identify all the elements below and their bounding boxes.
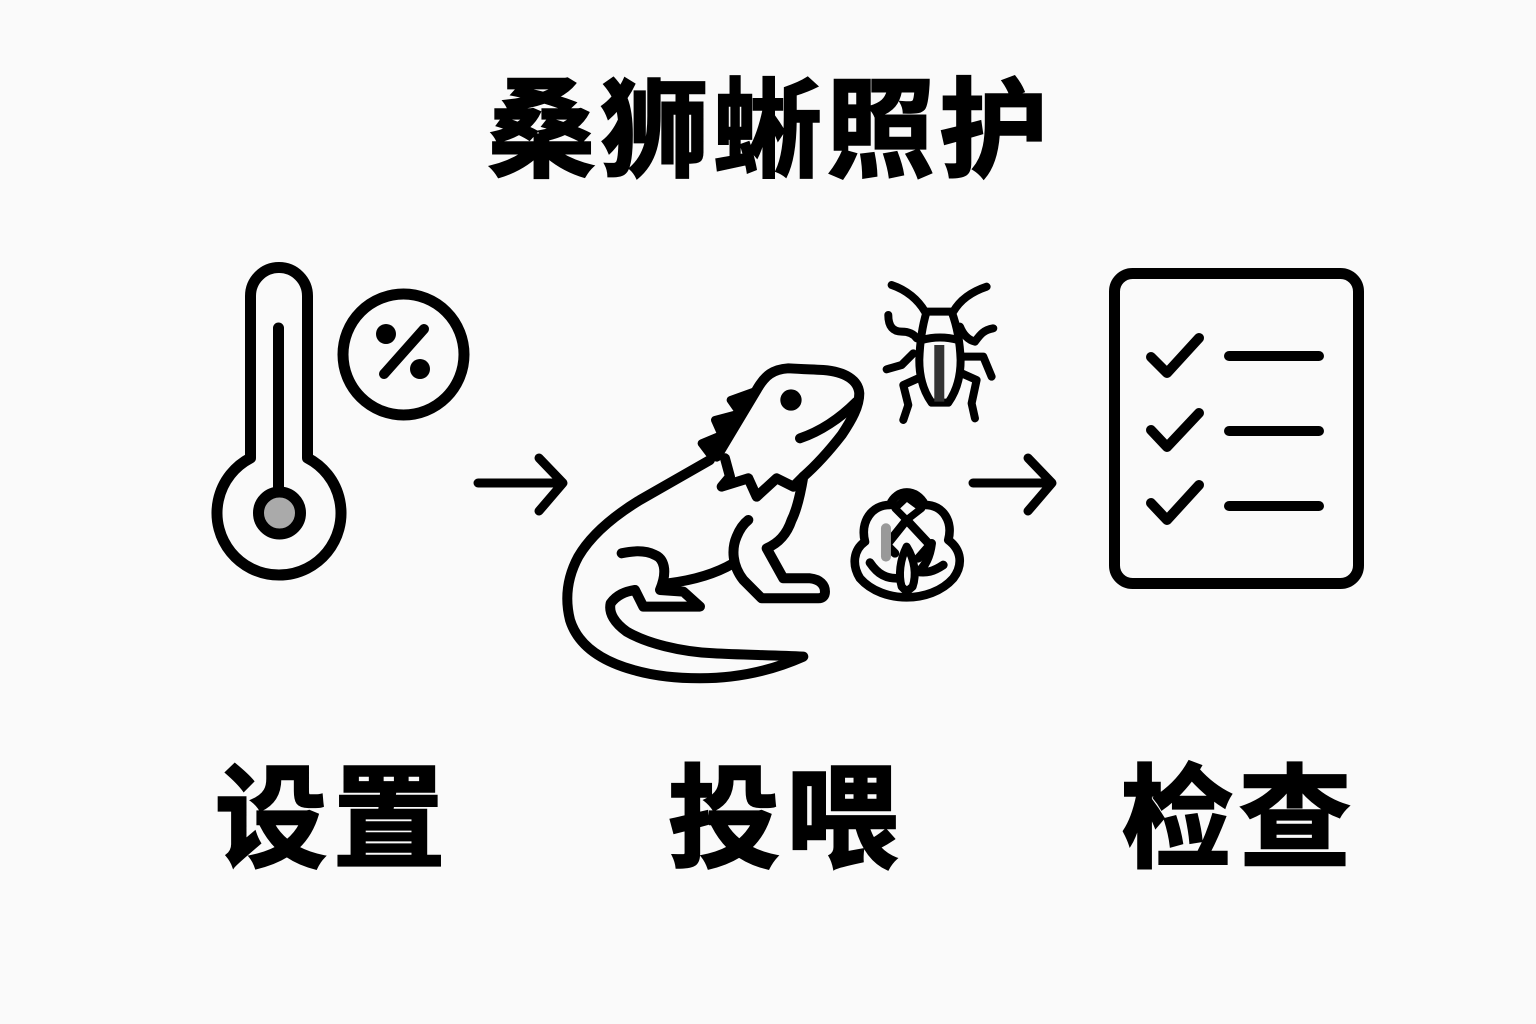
label: check: 检查 (1121, 757, 1357, 882)
icon: bearded dragon (567, 368, 859, 678)
icon: leafy greens (855, 492, 960, 597)
label: setup: 设置 (215, 757, 451, 882)
title: 桑狮蜥照护 (487, 70, 1053, 191)
icon: checklist (1114, 274, 1358, 584)
icon: insect (887, 285, 993, 420)
icon: humidity percent (343, 294, 464, 415)
icon: thermometer (217, 268, 341, 575)
label: feeding: 投喂 (668, 757, 904, 882)
arrow: feeding to checking (973, 458, 1052, 511)
arrow: setup to feeding (478, 458, 563, 511)
